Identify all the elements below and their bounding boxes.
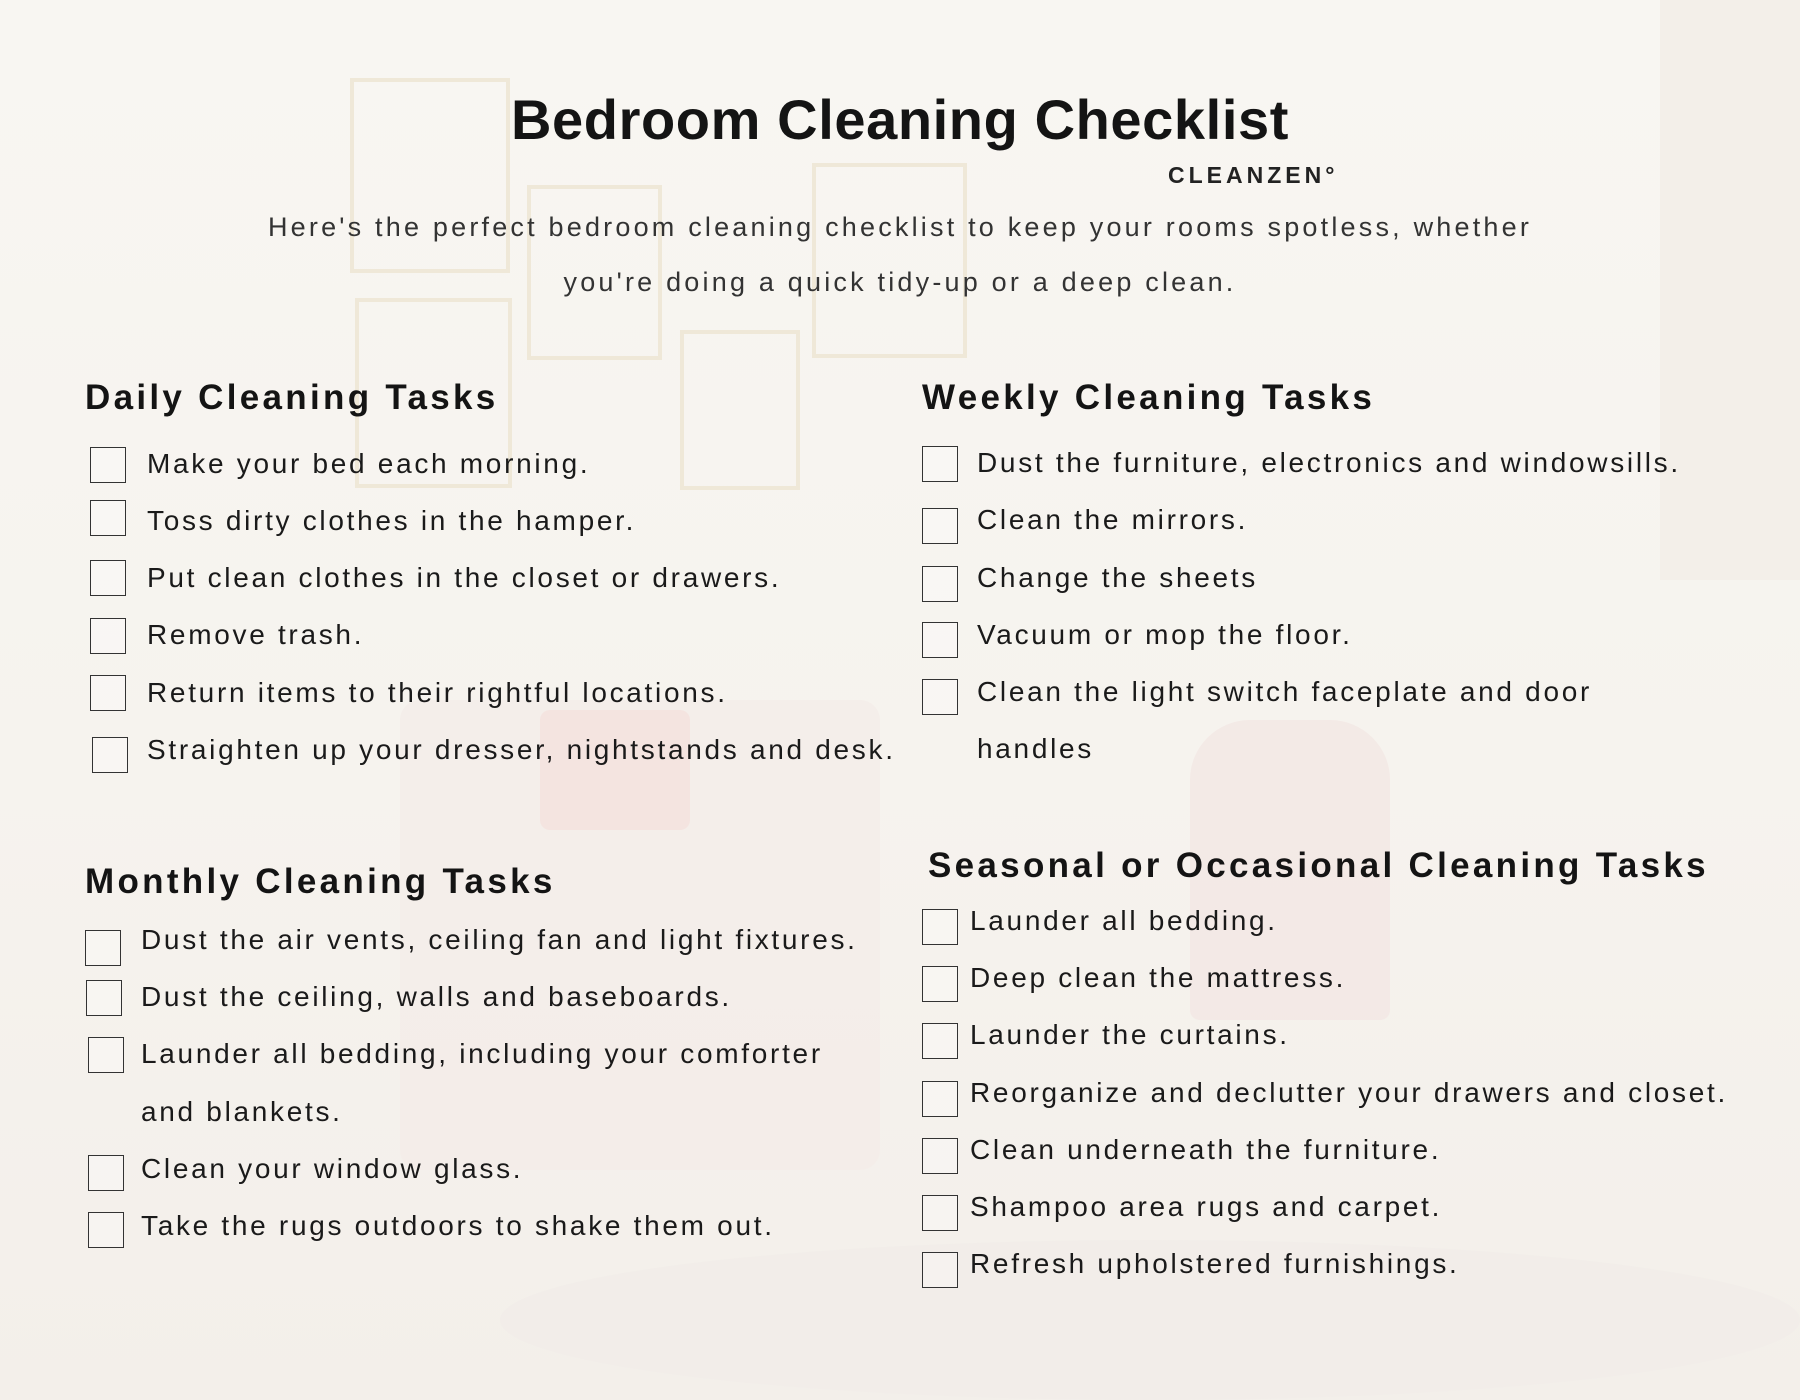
list: weekly items bbox=[922, 446, 1681, 764]
panel: daily: Straighten up your dresser, nightstands and desk. bbox=[147, 734, 896, 765]
brand logo: CLEANZEN° bbox=[1168, 162, 1338, 188]
heading: monthly: Monthly Cleaning Tasks bbox=[85, 862, 556, 901]
panel: monthly: Launder all bedding, including your comforter bbox=[141, 1038, 823, 1069]
panel: monthly: Dust the ceiling, walls and baseboards. bbox=[141, 981, 732, 1012]
panel: seasonal: Launder the curtains. bbox=[970, 1019, 1290, 1050]
panel: weekly: handles bbox=[977, 733, 1094, 764]
panel: seasonal: Reorganize and declutter your drawers and closet. bbox=[970, 1077, 1728, 1108]
panel: daily: Put clean clothes in the closet or drawers. bbox=[147, 562, 781, 593]
panel: weekly: Clean the mirrors. bbox=[977, 504, 1248, 535]
title: Bedroom Cleaning Checklist bbox=[511, 88, 1289, 151]
list: monthly items bbox=[85, 924, 858, 1248]
panel: weekly: Clean the light switch faceplate and door bbox=[977, 676, 1592, 707]
heading: daily: Daily Cleaning Tasks bbox=[85, 378, 499, 417]
panel: weekly: Change the sheets bbox=[977, 562, 1258, 593]
panel: weekly: Vacuum or mop the floor. bbox=[977, 619, 1353, 650]
panel: weekly: Dust the furniture, electronics and windowsills. bbox=[977, 447, 1681, 478]
panel: daily: Toss dirty clothes in the hamper. bbox=[147, 505, 636, 536]
panel: seasonal: Launder all bedding. bbox=[970, 905, 1278, 936]
panel: monthly: Clean your window glass. bbox=[141, 1153, 523, 1184]
panel: monthly: Take the rugs outdoors to shake them out. bbox=[141, 1210, 775, 1241]
panel: seasonal: Shampoo area rugs and carpet. bbox=[970, 1191, 1442, 1222]
panel: seasonal: Refresh upholstered furnishings. bbox=[970, 1248, 1460, 1279]
list: daily items bbox=[90, 447, 896, 773]
panel: monthly: Dust the air vents, ceiling fan and light fixtures. bbox=[141, 924, 858, 955]
list: seasonal items bbox=[922, 905, 1728, 1288]
panel: daily: Return items to their rightful locations. bbox=[147, 677, 728, 708]
intro text bbox=[268, 212, 1532, 297]
heading: weekly: Weekly Cleaning Tasks bbox=[922, 378, 1375, 417]
panel: seasonal: Clean underneath the furniture. bbox=[970, 1134, 1441, 1165]
panel: daily: Remove trash. bbox=[147, 619, 364, 650]
panel: daily: Make your bed each morning. bbox=[147, 448, 590, 479]
panel: seasonal: Deep clean the mattress. bbox=[970, 962, 1346, 993]
panel: monthly: and blankets. bbox=[141, 1096, 343, 1127]
intro text: you're doing a quick tidy-up or a deep clean. bbox=[564, 267, 1236, 297]
heading: seasonal: Seasonal or Occasional Cleaning Tasks bbox=[928, 846, 1709, 885]
intro text: Here's the perfect bedroom cleaning checklist to keep your rooms spotless, whether bbox=[268, 212, 1532, 242]
